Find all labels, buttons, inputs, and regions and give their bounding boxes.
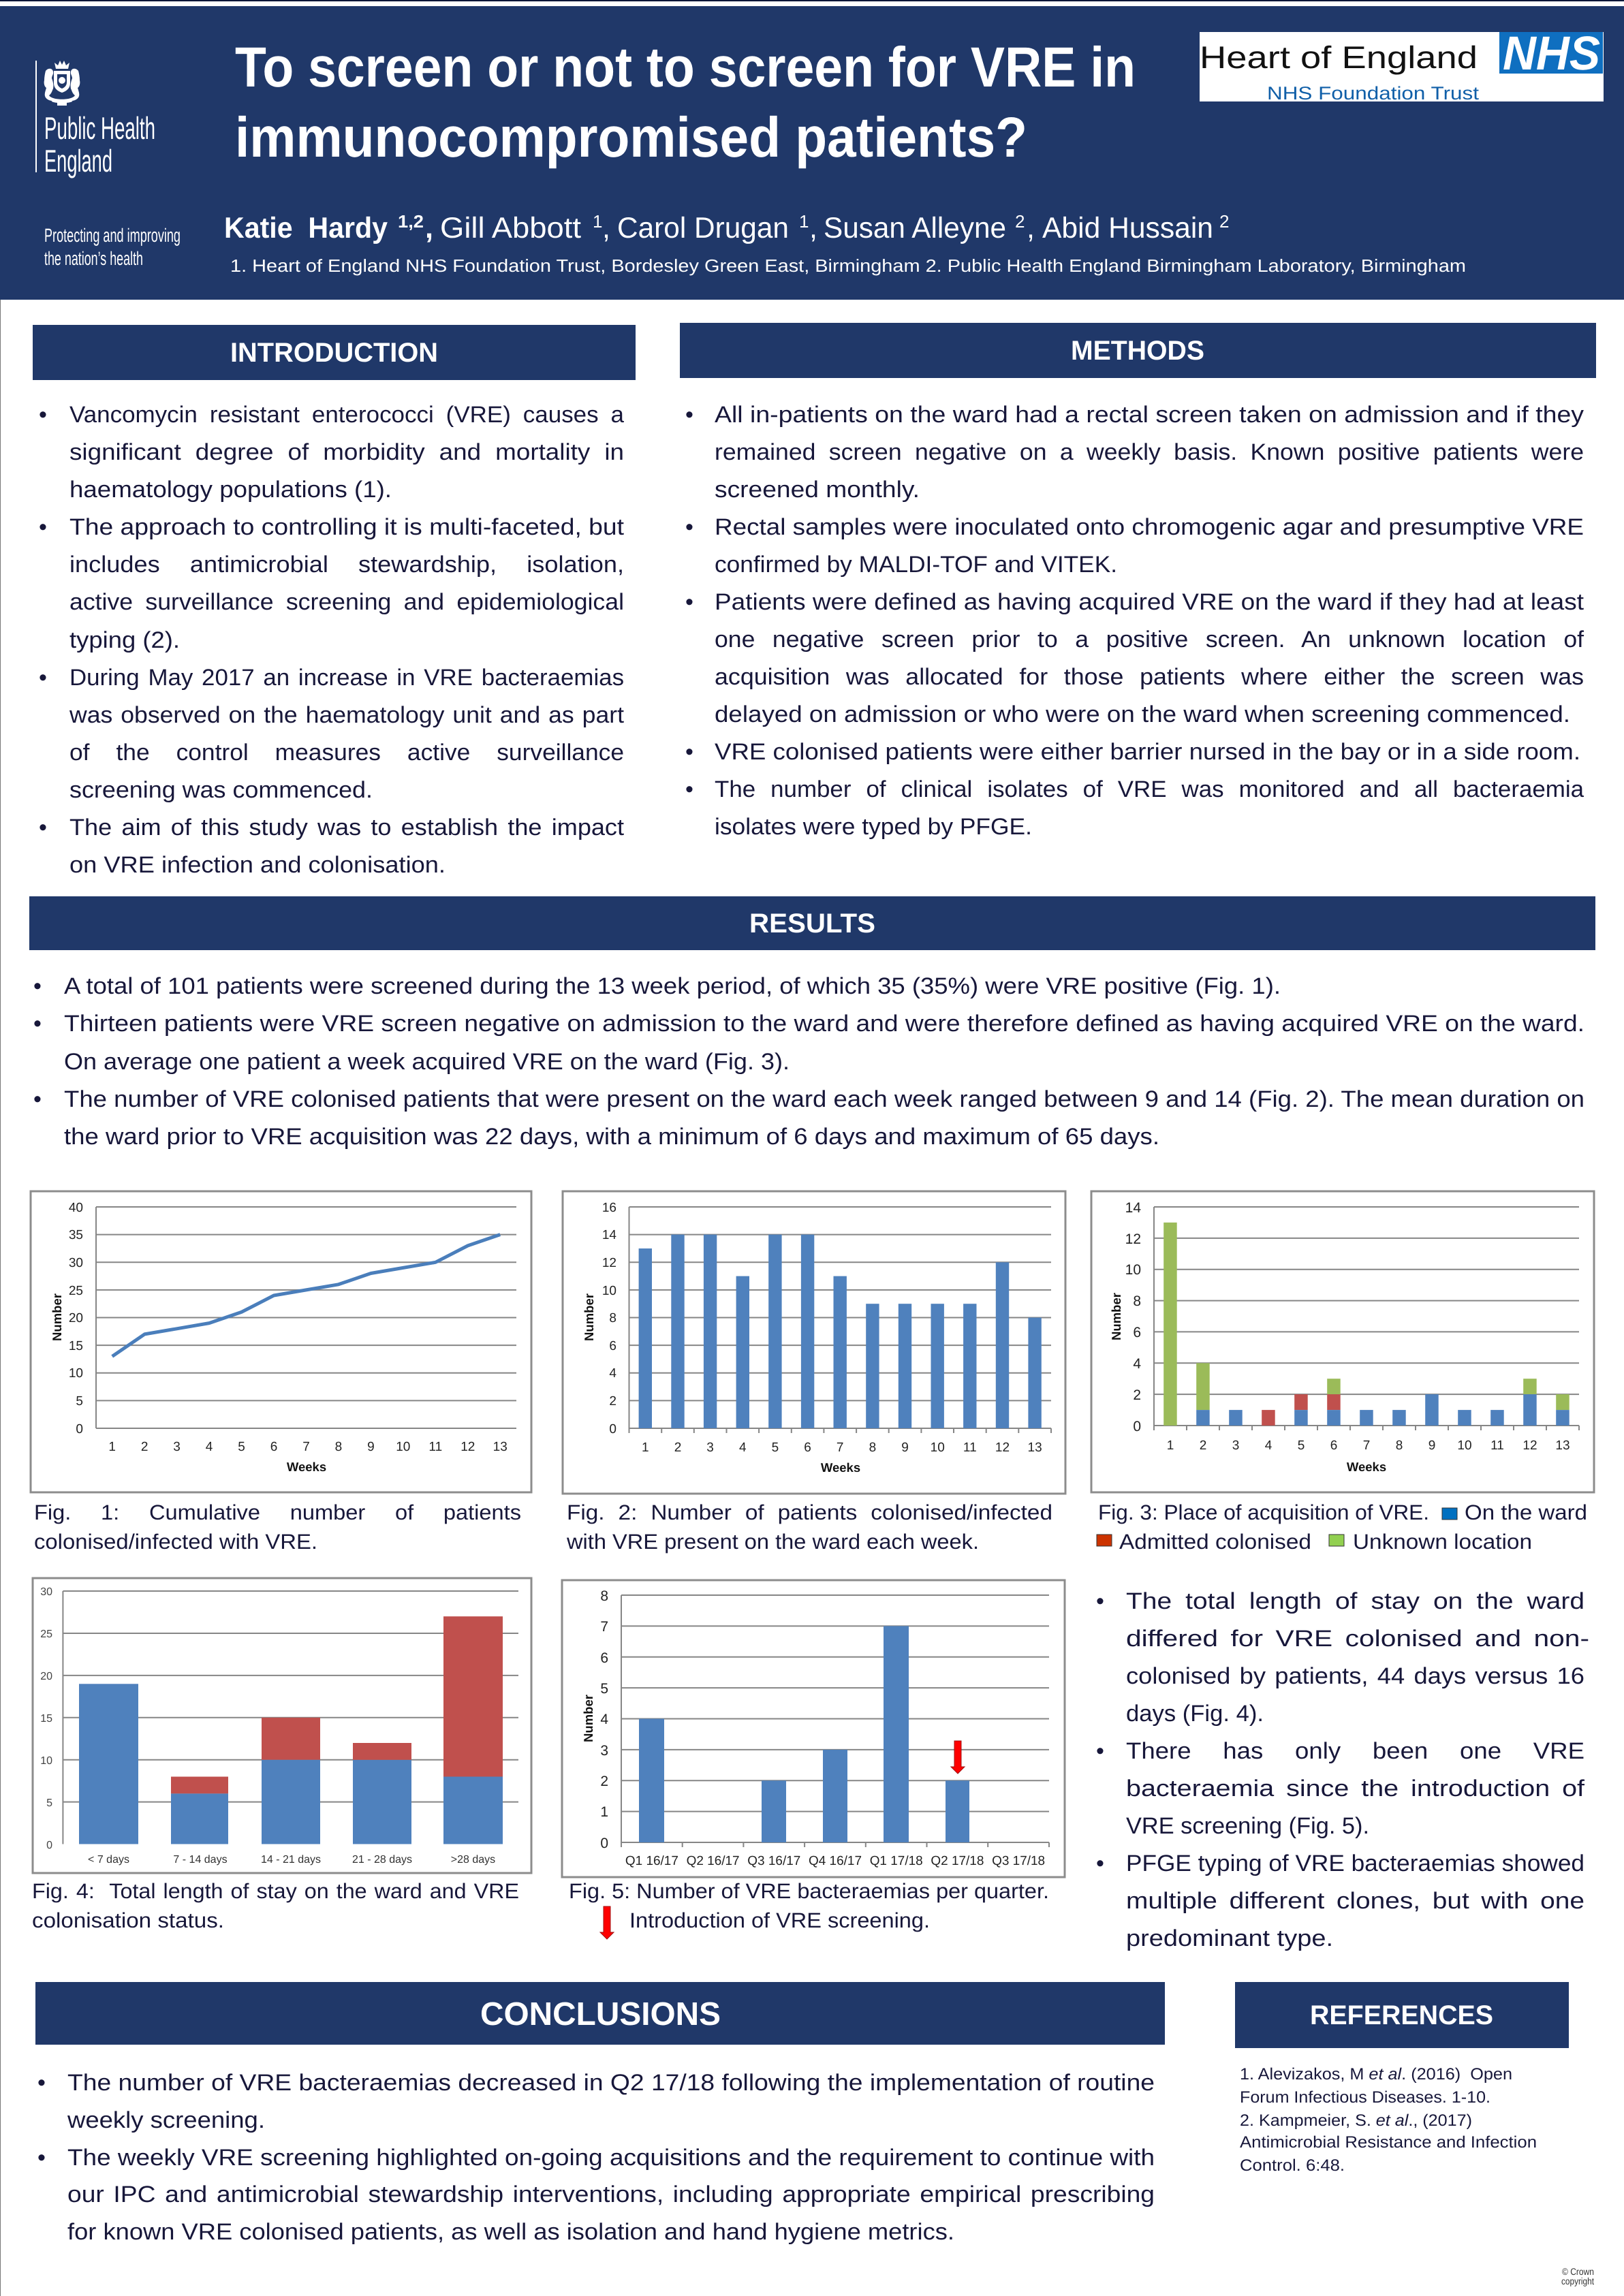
chart: figure 3 stacked bar chart: 10 [1125, 1262, 1141, 1278]
chart: figure 3 stacked bar chart: 3 [1232, 1438, 1239, 1453]
text block: conclusions bullets: • [37, 2145, 46, 2171]
chart: figure 3 stacked bar chart: 11 [1490, 1438, 1504, 1453]
chart: figure 1 cumulative line chart: 25 [69, 1284, 83, 1298]
tagline [44, 225, 181, 269]
authors: Gill Abbott [440, 212, 581, 245]
text block: results continued [1096, 1588, 1589, 1951]
chart: figure 1 cumulative line chart: 3 [173, 1440, 181, 1454]
heading: conclusions: CONCLUSIONS [480, 1996, 721, 2032]
chart: figure 3 stacked bar chart: 12 [1125, 1231, 1141, 1247]
chart: figure 1 cumulative line chart: 15 [69, 1339, 83, 1353]
chart: figure 3 stacked bar chart: 10 [1457, 1438, 1472, 1453]
chart: figure 4 length of stay stacked bars: 14 - 21 days [261, 1854, 321, 1866]
text block: results bullets: • [33, 1011, 42, 1037]
text block: introduction bullets: typing (2). [69, 627, 180, 653]
text block: results continued: • [1096, 1851, 1104, 1876]
authors: , [425, 212, 433, 245]
text block: results continued: VRE screening (Fig. 5). [1126, 1813, 1369, 1839]
text block: results bullets: • [33, 973, 42, 999]
chart: figure 2 weekly bar chart: 10 [931, 1441, 945, 1455]
chart: figure 5 bacteraemias per quarter: 0 [600, 1836, 608, 1851]
Heart of England NHS logo: NHS [1503, 27, 1600, 80]
chart: figure 4 length of stay stacked bars: 5 [46, 1797, 52, 1809]
chart: figure 4 length of stay stacked bars: 30 [40, 1586, 52, 1598]
chart: figure 2 weekly bar chart: 6 [804, 1441, 811, 1455]
heading: methods: METHODS [1071, 336, 1204, 366]
text block: methods bullets: • [685, 776, 693, 802]
chart: figure 1 cumulative line chart: 13 [493, 1440, 507, 1454]
text block: results bullets: The number of VRE colonised patients that were present on the ward each week ranged between 9 and 14 (Fig. 2). The mean duration on [64, 1086, 1584, 1112]
title: To screen or not to screen for VRE in [235, 35, 1136, 99]
text block: introduction bullets: haematology populations (1). [69, 477, 392, 503]
text block: reference list [1240, 2065, 1537, 2175]
chart: figure 3 stacked bar chart: 12 [1522, 1438, 1537, 1453]
chart: figure 2 weekly bar chart: 8 [609, 1311, 616, 1325]
heading: introduction [33, 325, 636, 380]
text block: introduction bullets: includes antimicrobial stewardship, isolation, [69, 552, 624, 578]
text block: conclusions bullets: for known VRE colonised patients, as well as isolation and hand hygiene metrics. [67, 2219, 954, 2245]
chart: figure 5 bacteraemias per quarter: Q3 16/17 [747, 1854, 800, 1868]
chart: figure 3 stacked bar chart [1091, 1191, 1594, 1492]
chart: figure 2 weekly bar chart: 2 [674, 1441, 681, 1455]
authors: Katie Hardy [224, 212, 388, 245]
text block: introduction bullets: • [39, 665, 47, 691]
chart: figure 3 stacked bar chart: 5 [1298, 1438, 1305, 1453]
text block: methods bullets: acquisition was allocated for those patients where either the screen was [715, 664, 1584, 690]
copyright note: © Crown [1562, 2266, 1594, 2277]
text block: conclusions bullets: our IPC and antimicrobial stewardship interventions, including appropriate empirical prescribing [67, 2182, 1155, 2207]
text block: conclusions bullets [37, 2070, 1155, 2245]
authors: Carol Drugan [617, 212, 789, 245]
text block: reference list: Forum Infectious Diseases. 1-10. [1240, 2088, 1490, 2107]
caption and legend: figure 3: Unknown location [1353, 1530, 1532, 1554]
caption: figure 5: Introduction of VRE screening. [629, 1908, 930, 1932]
heading: references: REFERENCES [1310, 2000, 1493, 2030]
text block: results bullets: On average one patient a week acquired VRE on the ward (Fig. 3). [64, 1049, 790, 1075]
chart: figure 3 stacked bar chart: 2 [1133, 1387, 1141, 1403]
text block: results continued: • [1096, 1738, 1104, 1764]
chart: figure 2 weekly bar chart: 0 [609, 1422, 616, 1436]
chart: figure 4 length of stay stacked bars [33, 1578, 531, 1873]
chart: figure 1 cumulative line chart: 4 [206, 1440, 213, 1454]
text block: introduction bullets: active surveillance screening and epidemiological [69, 589, 624, 615]
chart: figure 2 weekly bar chart: 12 [995, 1441, 1010, 1455]
chart: figure 3 stacked bar chart: 1 [1167, 1438, 1174, 1453]
caption and legend: figure 3: Admitted colonised [1119, 1530, 1311, 1554]
chart: figure 5 bacteraemias per quarter: 3 [600, 1743, 608, 1759]
chart: figure 1 cumulative line chart: 10 [69, 1366, 83, 1381]
arrow: screening introduced [951, 1741, 965, 1774]
chart: figure 5 bacteraemias per quarter: Q2 16/17 [687, 1854, 740, 1868]
chart: figure 4 length of stay stacked bars: 10 [40, 1755, 52, 1767]
text block: results bullets: A total of 101 patients were screened during the 13 week period, of which 35 (35%) were VRE positive (Fig. 1). [64, 973, 1281, 999]
chart: figure 1 cumulative line chart: 20 [69, 1311, 83, 1325]
chart: figure 4 length of stay stacked bars: 21 - 28 days [352, 1854, 412, 1866]
chart: figure 2 weekly bar chart: 8 [869, 1441, 876, 1455]
heading: methods [680, 323, 1596, 378]
organisation name: England [44, 143, 112, 178]
panel: references [1235, 1982, 1569, 2175]
panel: results [29, 896, 1595, 1150]
authors: 1 [799, 211, 809, 232]
chart: figure 3 stacked bar chart: Number [1109, 1293, 1123, 1340]
chart: figure 3 stacked bar chart: 6 [1133, 1325, 1141, 1340]
title [235, 35, 1136, 169]
chart: figure 2 weekly bar chart: 16 [602, 1201, 616, 1215]
text block: methods bullets: Patients were defined as having acquired VRE on the ward if they had at least [715, 589, 1584, 615]
arrow: legend key [600, 1906, 614, 1939]
text block: introduction bullets: The aim of this study was to establish the impact [69, 815, 625, 840]
chart: figure 5 bacteraemias per quarter: Q2 17/18 [931, 1854, 984, 1868]
chart: figure 5 bacteraemias per quarter [562, 1580, 1065, 1877]
chart: figure 4 length of stay stacked bars: 25 [40, 1629, 52, 1640]
text block: results continued: PFGE typing of VRE bacteraemias showed [1126, 1851, 1584, 1876]
chart: figure 1 cumulative line chart: 2 [141, 1440, 148, 1454]
text block: introduction bullets: of the control measures active surveillance [69, 740, 624, 766]
text block: reference list: Antimicrobial Resistance and Infection [1240, 2133, 1537, 2152]
chart: figure 1 cumulative line chart: 0 [76, 1422, 83, 1436]
heading: introduction: INTRODUCTION [230, 338, 438, 368]
panel: conclusions [35, 1982, 1165, 2245]
caption: figure 2: with VRE present on the ward each week. [566, 1530, 979, 1554]
text block: introduction bullets: • [39, 402, 47, 428]
text block: reference list: 2. Kampmeier, S. et al., (2017) [1240, 2111, 1472, 2130]
text block: results continued: differed for VRE colonised and non- [1126, 1626, 1589, 1652]
text block: results continued: predominant type. [1126, 1925, 1333, 1951]
chart: figure 3 stacked bar chart: 9 [1428, 1438, 1435, 1453]
text block: methods bullets: screened monthly. [715, 477, 920, 503]
chart: figure 4 length of stay stacked bars: 15 [40, 1713, 52, 1725]
authors: , [1027, 212, 1035, 245]
chart: figure 5 bacteraemias per quarter: 6 [600, 1650, 608, 1666]
text block: methods bullets: confirmed by MALDI-TOF and VITEK. [715, 552, 1117, 578]
text block: methods bullets: • [685, 514, 693, 540]
chart: figure 1 cumulative line chart: 30 [69, 1256, 83, 1270]
chart: figure 2 weekly bar chart: 14 [602, 1228, 616, 1242]
chart: figure 1 cumulative line chart: 11 [428, 1440, 442, 1454]
chart: figure 3 stacked bar chart: 8 [1396, 1438, 1403, 1453]
chart: figure 2 weekly bar chart: 10 [602, 1284, 616, 1298]
chart: figure 1 cumulative line chart: 1 [108, 1440, 116, 1454]
chart: figure 1 cumulative line chart: 7 [302, 1440, 310, 1454]
caption: figure 2 [566, 1500, 1052, 1554]
text block: methods bullets: delayed on admission or who were on the ward when screening commenced. [715, 702, 1570, 727]
text block: results bullets [33, 973, 1584, 1150]
text block: conclusions bullets: weekly screening. [67, 2107, 265, 2133]
caption and legend: figure 3: On the ward [1465, 1500, 1587, 1524]
affiliations: 1. Heart of England NHS Foundation Trust, Bordesley Green East, Birmingham 2. Public Health England Birmingham Laboratory, Birmingham [230, 255, 1466, 276]
text block: results continued: bacteraemia since the introduction of [1126, 1776, 1585, 1802]
caption: figure 5: Fig. 5: Number of VRE bacteraemias per quarter. [569, 1879, 1049, 1903]
heading: references [1235, 1982, 1569, 2048]
chart: figure 3 stacked bar chart: 2 [1200, 1438, 1206, 1453]
chart: figure 1 cumulative line chart: 8 [335, 1440, 342, 1454]
authors: 2 [1219, 211, 1229, 232]
heading: results [29, 896, 1595, 950]
chart: figure 2 weekly bar chart: 13 [1028, 1441, 1042, 1455]
chart: figure 5 bacteraemias per quarter: 2 [600, 1774, 608, 1789]
chart: figure 1 cumulative line chart: 10 [396, 1440, 410, 1454]
text block: introduction bullets: screening was commenced. [69, 777, 373, 803]
chart: figure 3 stacked bar chart: 4 [1265, 1438, 1272, 1453]
text block: results continued: There has only been one VRE [1126, 1738, 1584, 1764]
panel: methods [680, 323, 1596, 840]
authors: 1 [593, 211, 602, 232]
organisation name [44, 110, 155, 178]
title: immunocompromised patients? [235, 106, 1027, 169]
chart: figure 5 bacteraemias per quarter: 1 [600, 1804, 608, 1820]
text block: reference list: Control. 6:48. [1240, 2156, 1345, 2175]
chart: figure 2 weekly bar chart: 2 [609, 1394, 616, 1409]
text block: methods bullets: isolates were typed by PFGE. [715, 814, 1032, 840]
chart: figure 2 weekly bar chart: 5 [772, 1441, 779, 1455]
chart: figure 5 bacteraemias per quarter: Q4 16/17 [809, 1854, 862, 1868]
caption and legend: figure 3: Fig. 3: Place of acquisition of VRE. [1098, 1500, 1429, 1524]
text block: introduction bullets: was observed on the haematology unit and as part [69, 702, 625, 728]
chart: figure 1 cumulative line chart: Number [50, 1293, 64, 1341]
icon: royal crest [44, 61, 80, 106]
text block: methods bullets: • [685, 739, 693, 765]
authors: Susan Alleyne [824, 212, 1006, 245]
chart: figure 3 stacked bar chart: 13 [1555, 1438, 1570, 1453]
caption: figure 2: Fig. 2: Number of patients colonised/infected [567, 1500, 1052, 1524]
text block: methods bullets: Rectal samples were inoculated onto chromogenic agar and presumptive VRE [715, 514, 1584, 540]
chart: figure 5 bacteraemias per quarter: 8 [600, 1588, 608, 1604]
chart: figure 2 weekly bar chart: 6 [609, 1339, 616, 1353]
text block: methods bullets: The number of clinical isolates of VRE was monitored and all bacteraemia [715, 776, 1584, 802]
chart: figure 5 bacteraemias per quarter: 7 [600, 1619, 608, 1635]
organisation name: Public Health [44, 110, 155, 146]
text block: introduction bullets: The approach to controlling it is multi-faceted, but [69, 514, 625, 540]
caption: figure 1: Fig. 1: Cumulative number of patients [34, 1500, 521, 1524]
authors: , [809, 212, 817, 245]
chart: figure 4 length of stay stacked bars: 7 - 14 days [173, 1854, 228, 1866]
copyright note: copyright [1561, 2276, 1594, 2286]
text block: introduction bullets: on VRE infection and colonisation. [69, 852, 446, 878]
tagline: the nation’s health [44, 248, 143, 269]
chart: figure 3 stacked bar chart: 4 [1133, 1356, 1141, 1372]
chart: figure 1 cumulative line chart: 9 [367, 1440, 375, 1454]
chart: figure 3 stacked bar chart: 14 [1125, 1200, 1141, 1216]
text block: results bullets: the ward prior to VRE acquisition was 22 days, with a minimum of 6 days and maximum of 65 days. [64, 1124, 1159, 1150]
chart: figure 4 length of stay stacked bars: < 7 days [88, 1854, 129, 1866]
authors: Abid Hussain [1042, 212, 1213, 245]
text block: conclusions bullets: The number of VRE bacteraemias decreased in Q2 17/18 following the implementation of routine [67, 2070, 1155, 2096]
chart: figure 3 stacked bar chart: 6 [1330, 1438, 1337, 1453]
text block: results continued: multiple different clones, but with one [1126, 1888, 1584, 1914]
text block: results bullets: Thirteen patients were VRE screen negative on admission to the ward and were therefore defined as having acquired VRE on the ward. [64, 1011, 1584, 1037]
panel: introduction [33, 325, 636, 878]
Heart of England NHS logo: Heart of England [1200, 40, 1478, 75]
text block: conclusions bullets: The weekly VRE screening highlighted on-going acquisitions and the requirement to continue with [67, 2145, 1155, 2171]
chart: figure 5 bacteraemias per quarter: Q1 17/18 [870, 1854, 923, 1868]
text block: methods bullets [685, 402, 1584, 840]
chart: figure 2 weekly bar chart: 3 [706, 1441, 714, 1455]
text block: introduction bullets: • [39, 815, 47, 840]
chart: figure 1 cumulative line chart: Weeks [287, 1460, 326, 1474]
chart: figure 2 weekly bar chart: 12 [602, 1256, 616, 1270]
text block: methods bullets: remained screen negative on a weekly basis. Known positive patients were [715, 439, 1584, 465]
Public Health England logo [35, 61, 181, 269]
chart: figure 3 stacked bar chart: 0 [1133, 1419, 1141, 1434]
chart: figure 1 cumulative line chart: 5 [238, 1440, 245, 1454]
text block: results bullets: • [33, 1086, 42, 1112]
text block: reference list: 1. Alevizakos, M et al. (2016) Open [1240, 2065, 1512, 2083]
text block: introduction bullets: Vancomycin resistant enterococci (VRE) causes a [69, 402, 624, 428]
chart: figure 1 cumulative line chart: 6 [270, 1440, 277, 1454]
caption: figure 4: colonisation status. [32, 1908, 224, 1932]
caption: figure 4 [32, 1879, 519, 1932]
text block: methods bullets: All in-patients on the ward had a rectal screen taken on admission and if they [715, 402, 1584, 428]
text block: results continued: • [1096, 1588, 1104, 1614]
authors: 2 [1015, 211, 1025, 232]
copyright note [1561, 2266, 1594, 2286]
caption: figure 5 [569, 1879, 1049, 1939]
text block: methods bullets: one negative screen prior to a positive screen. An unknown location of [715, 627, 1584, 652]
Heart of England NHS logo [1200, 27, 1604, 104]
chart: figure 5 bacteraemias per quarter: 4 [600, 1712, 608, 1727]
chart: figure 3 stacked bar chart: 8 [1133, 1293, 1141, 1309]
text block: methods bullets: • [685, 402, 693, 428]
header banner [0, 6, 1624, 300]
authors [224, 211, 1229, 245]
chart: figure 5 bacteraemias per quarter: Q3 17/18 [992, 1854, 1045, 1868]
heading: results: RESULTS [749, 909, 875, 939]
caption: figure 1: colonised/infected with VRE. [34, 1530, 317, 1554]
authors: , [602, 212, 610, 245]
chart: figure 3 stacked bar chart: Weeks [1347, 1460, 1386, 1474]
chart: figure 5 bacteraemias per quarter: Q1 16/17 [625, 1854, 678, 1868]
chart: figure 5 bacteraemias per quarter: 5 [600, 1681, 608, 1697]
text block: introduction bullets: • [39, 514, 47, 540]
chart: figure 3 stacked bar chart: 7 [1363, 1438, 1370, 1453]
chart: figure 2 weekly bar chart: Number [582, 1293, 596, 1341]
Heart of England NHS logo: NHS Foundation Trust [1267, 83, 1480, 104]
chart: figure 4 length of stay stacked bars: >28 days [451, 1854, 495, 1866]
chart: figure 2 weekly bar chart: 4 [609, 1366, 616, 1381]
caption: figure 1 [34, 1500, 521, 1554]
chart: figure 2 weekly bar chart: 7 [837, 1441, 843, 1455]
chart: figure 4 length of stay stacked bars: 0 [46, 1840, 52, 1851]
text block: introduction bullets [39, 402, 625, 878]
chart: figure 1 cumulative line chart: 40 [69, 1201, 83, 1215]
chart: figure 5 bacteraemias per quarter: Number [581, 1695, 595, 1742]
chart: figure 1 cumulative line chart [31, 1191, 531, 1492]
caption and legend: figure 3 [1097, 1500, 1587, 1554]
text block: introduction bullets: significant degree of morbidity and mortality in [69, 439, 624, 465]
text block: introduction bullets: During May 2017 an increase in VRE bacteraemias [69, 665, 624, 691]
text block: results continued: The total length of stay on the ward [1126, 1588, 1584, 1614]
chart: figure 2 weekly bar chart: Weeks [821, 1460, 860, 1475]
authors: 1,2 [398, 211, 424, 232]
text block: methods bullets: • [685, 589, 693, 615]
chart: figure 1 cumulative line chart: 12 [460, 1440, 475, 1454]
chart: figure 2 weekly bar chart: 4 [739, 1441, 747, 1455]
chart: figure 1 cumulative line chart: 5 [76, 1394, 83, 1409]
tagline: Protecting and improving [44, 225, 181, 246]
text block: results continued: days (Fig. 4). [1126, 1701, 1264, 1727]
chart: figure 1 cumulative line chart: 35 [69, 1228, 83, 1242]
text block: results continued: colonised by patients, 44 days versus 16 [1126, 1663, 1584, 1689]
chart: figure 4 length of stay stacked bars: 20 [40, 1671, 52, 1682]
chart: figure 2 weekly bar chart: 11 [963, 1441, 977, 1455]
text block: conclusions bullets: • [37, 2070, 46, 2096]
chart: figure 2 weekly bar chart [563, 1191, 1065, 1494]
heading: conclusions [35, 1982, 1165, 2045]
text block: methods bullets: VRE colonised patients were either barrier nursed in the bay or in a side room. [715, 739, 1580, 765]
caption: figure 4: Fig. 4: Total length of stay on the ward and VRE [32, 1879, 519, 1903]
chart: figure 2 weekly bar chart: 9 [901, 1441, 909, 1455]
chart: figure 2 weekly bar chart: 1 [642, 1441, 649, 1455]
